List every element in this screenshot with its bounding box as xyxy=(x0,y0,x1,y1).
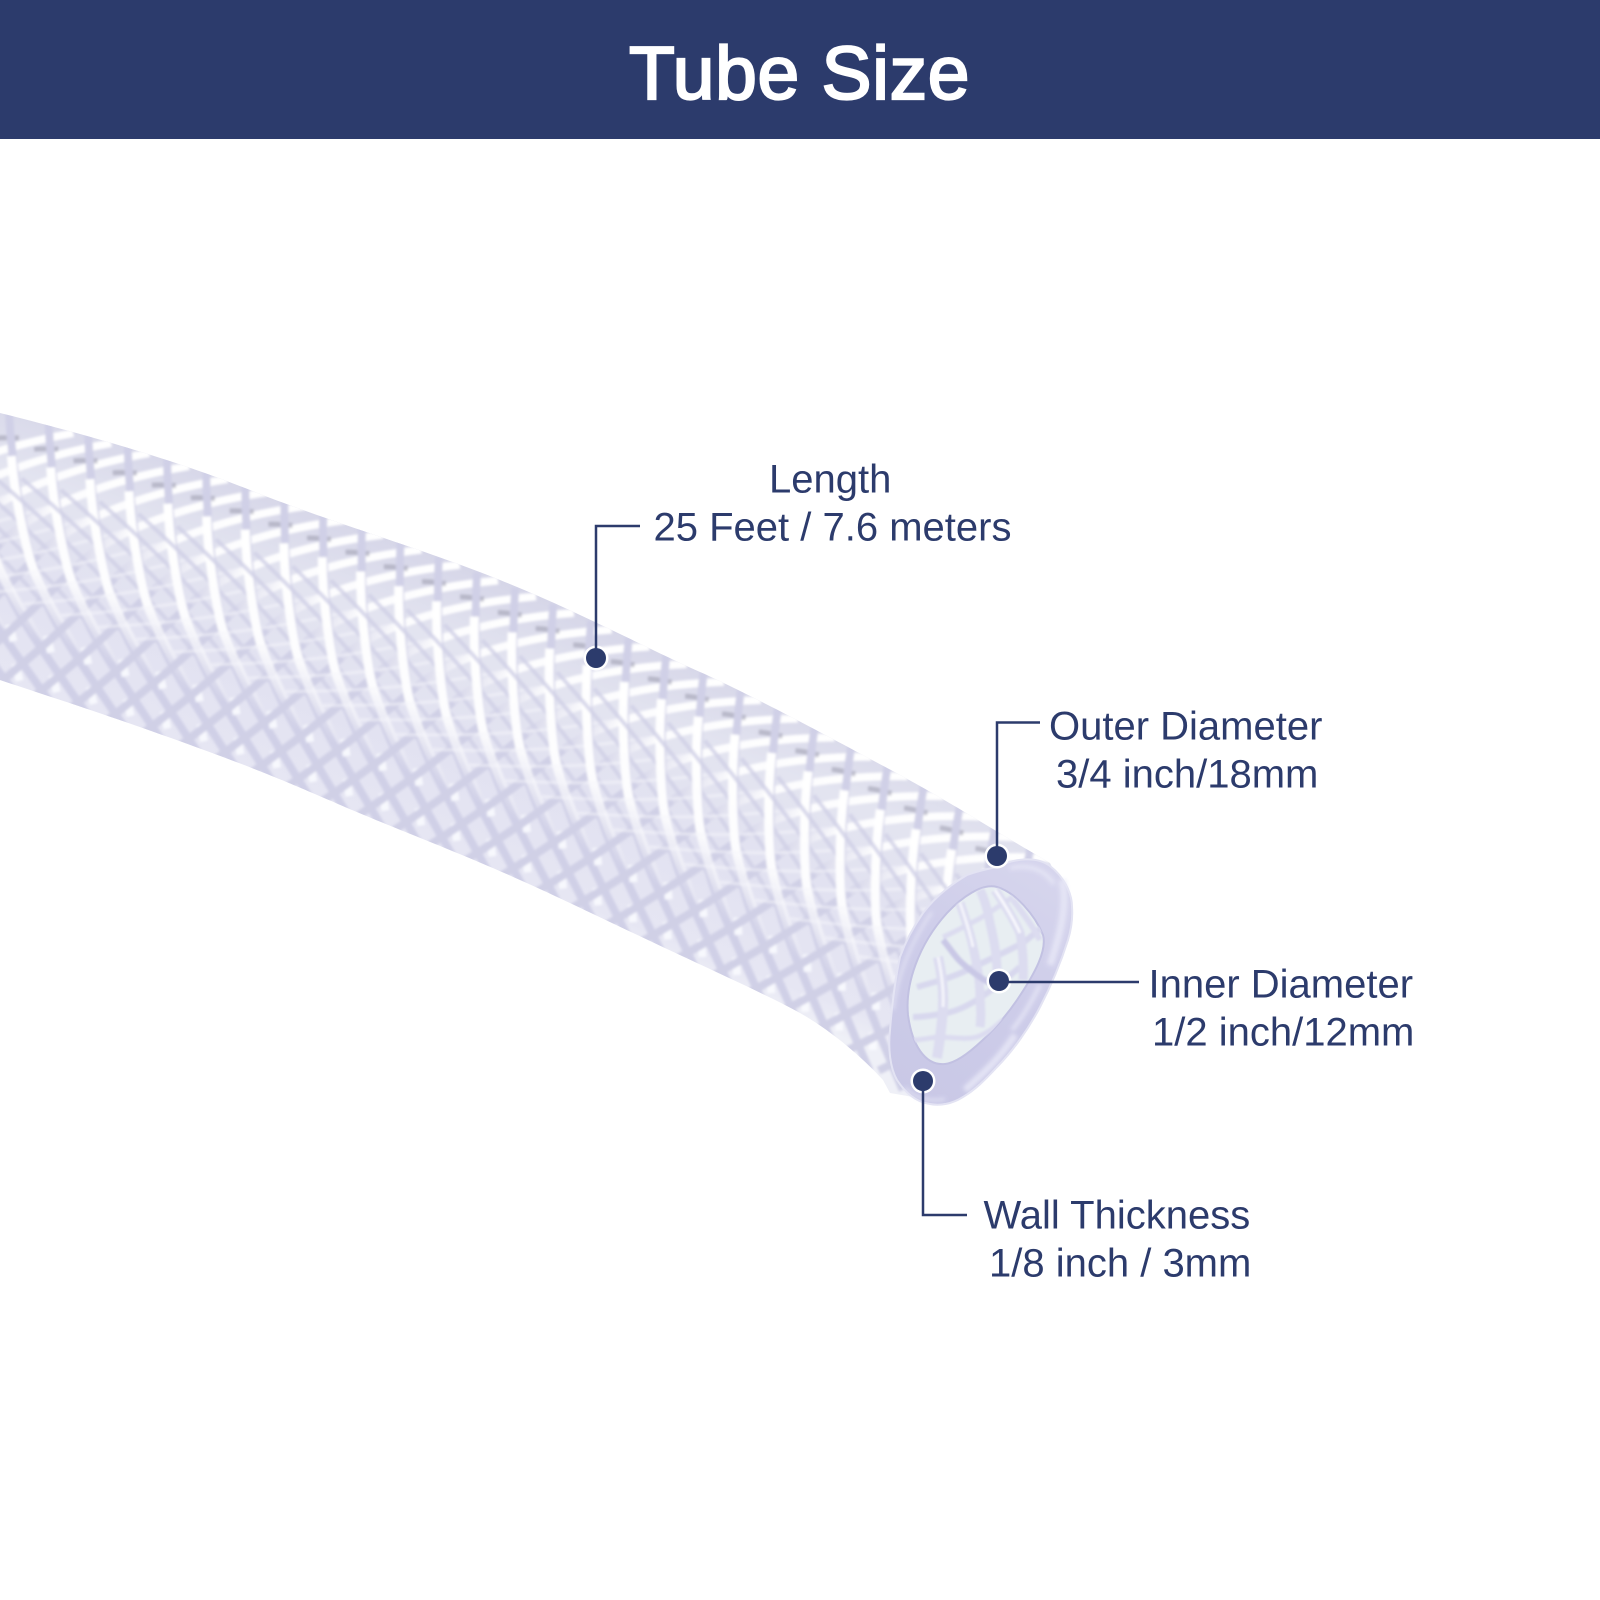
wall thickness value: 1/8 inch / 3mm xyxy=(989,1242,1251,1286)
outer diameter label: Outer Diameter xyxy=(1049,704,1322,748)
callout: wall thickness xyxy=(910,1068,1251,1286)
inner diameter label: Inner Diameter xyxy=(1148,962,1413,1006)
infographic canvas xyxy=(0,0,1600,1277)
tube end ring xyxy=(889,859,1072,1105)
illustration: braided clear tube xyxy=(0,413,1074,1106)
ring highlights xyxy=(893,867,1064,1100)
braided mesh xyxy=(0,414,1048,1092)
outer diameter value: 3/4 inch/18mm xyxy=(1056,752,1318,796)
callout: inner diameter xyxy=(986,962,1414,1054)
tube body xyxy=(0,413,1072,1102)
wall thickness label: Wall Thickness xyxy=(984,1194,1250,1238)
inner diameter value: 1/2 inch/12mm xyxy=(1152,1010,1414,1054)
length label: Length xyxy=(769,458,891,502)
title: Tube Size xyxy=(629,31,970,115)
header bar xyxy=(0,0,1600,139)
length value: 25 Feet / 7.6 meters xyxy=(654,506,1011,550)
callout: length xyxy=(584,458,1011,670)
callout: outer diameter xyxy=(984,704,1322,868)
inner bore xyxy=(908,886,1045,1064)
